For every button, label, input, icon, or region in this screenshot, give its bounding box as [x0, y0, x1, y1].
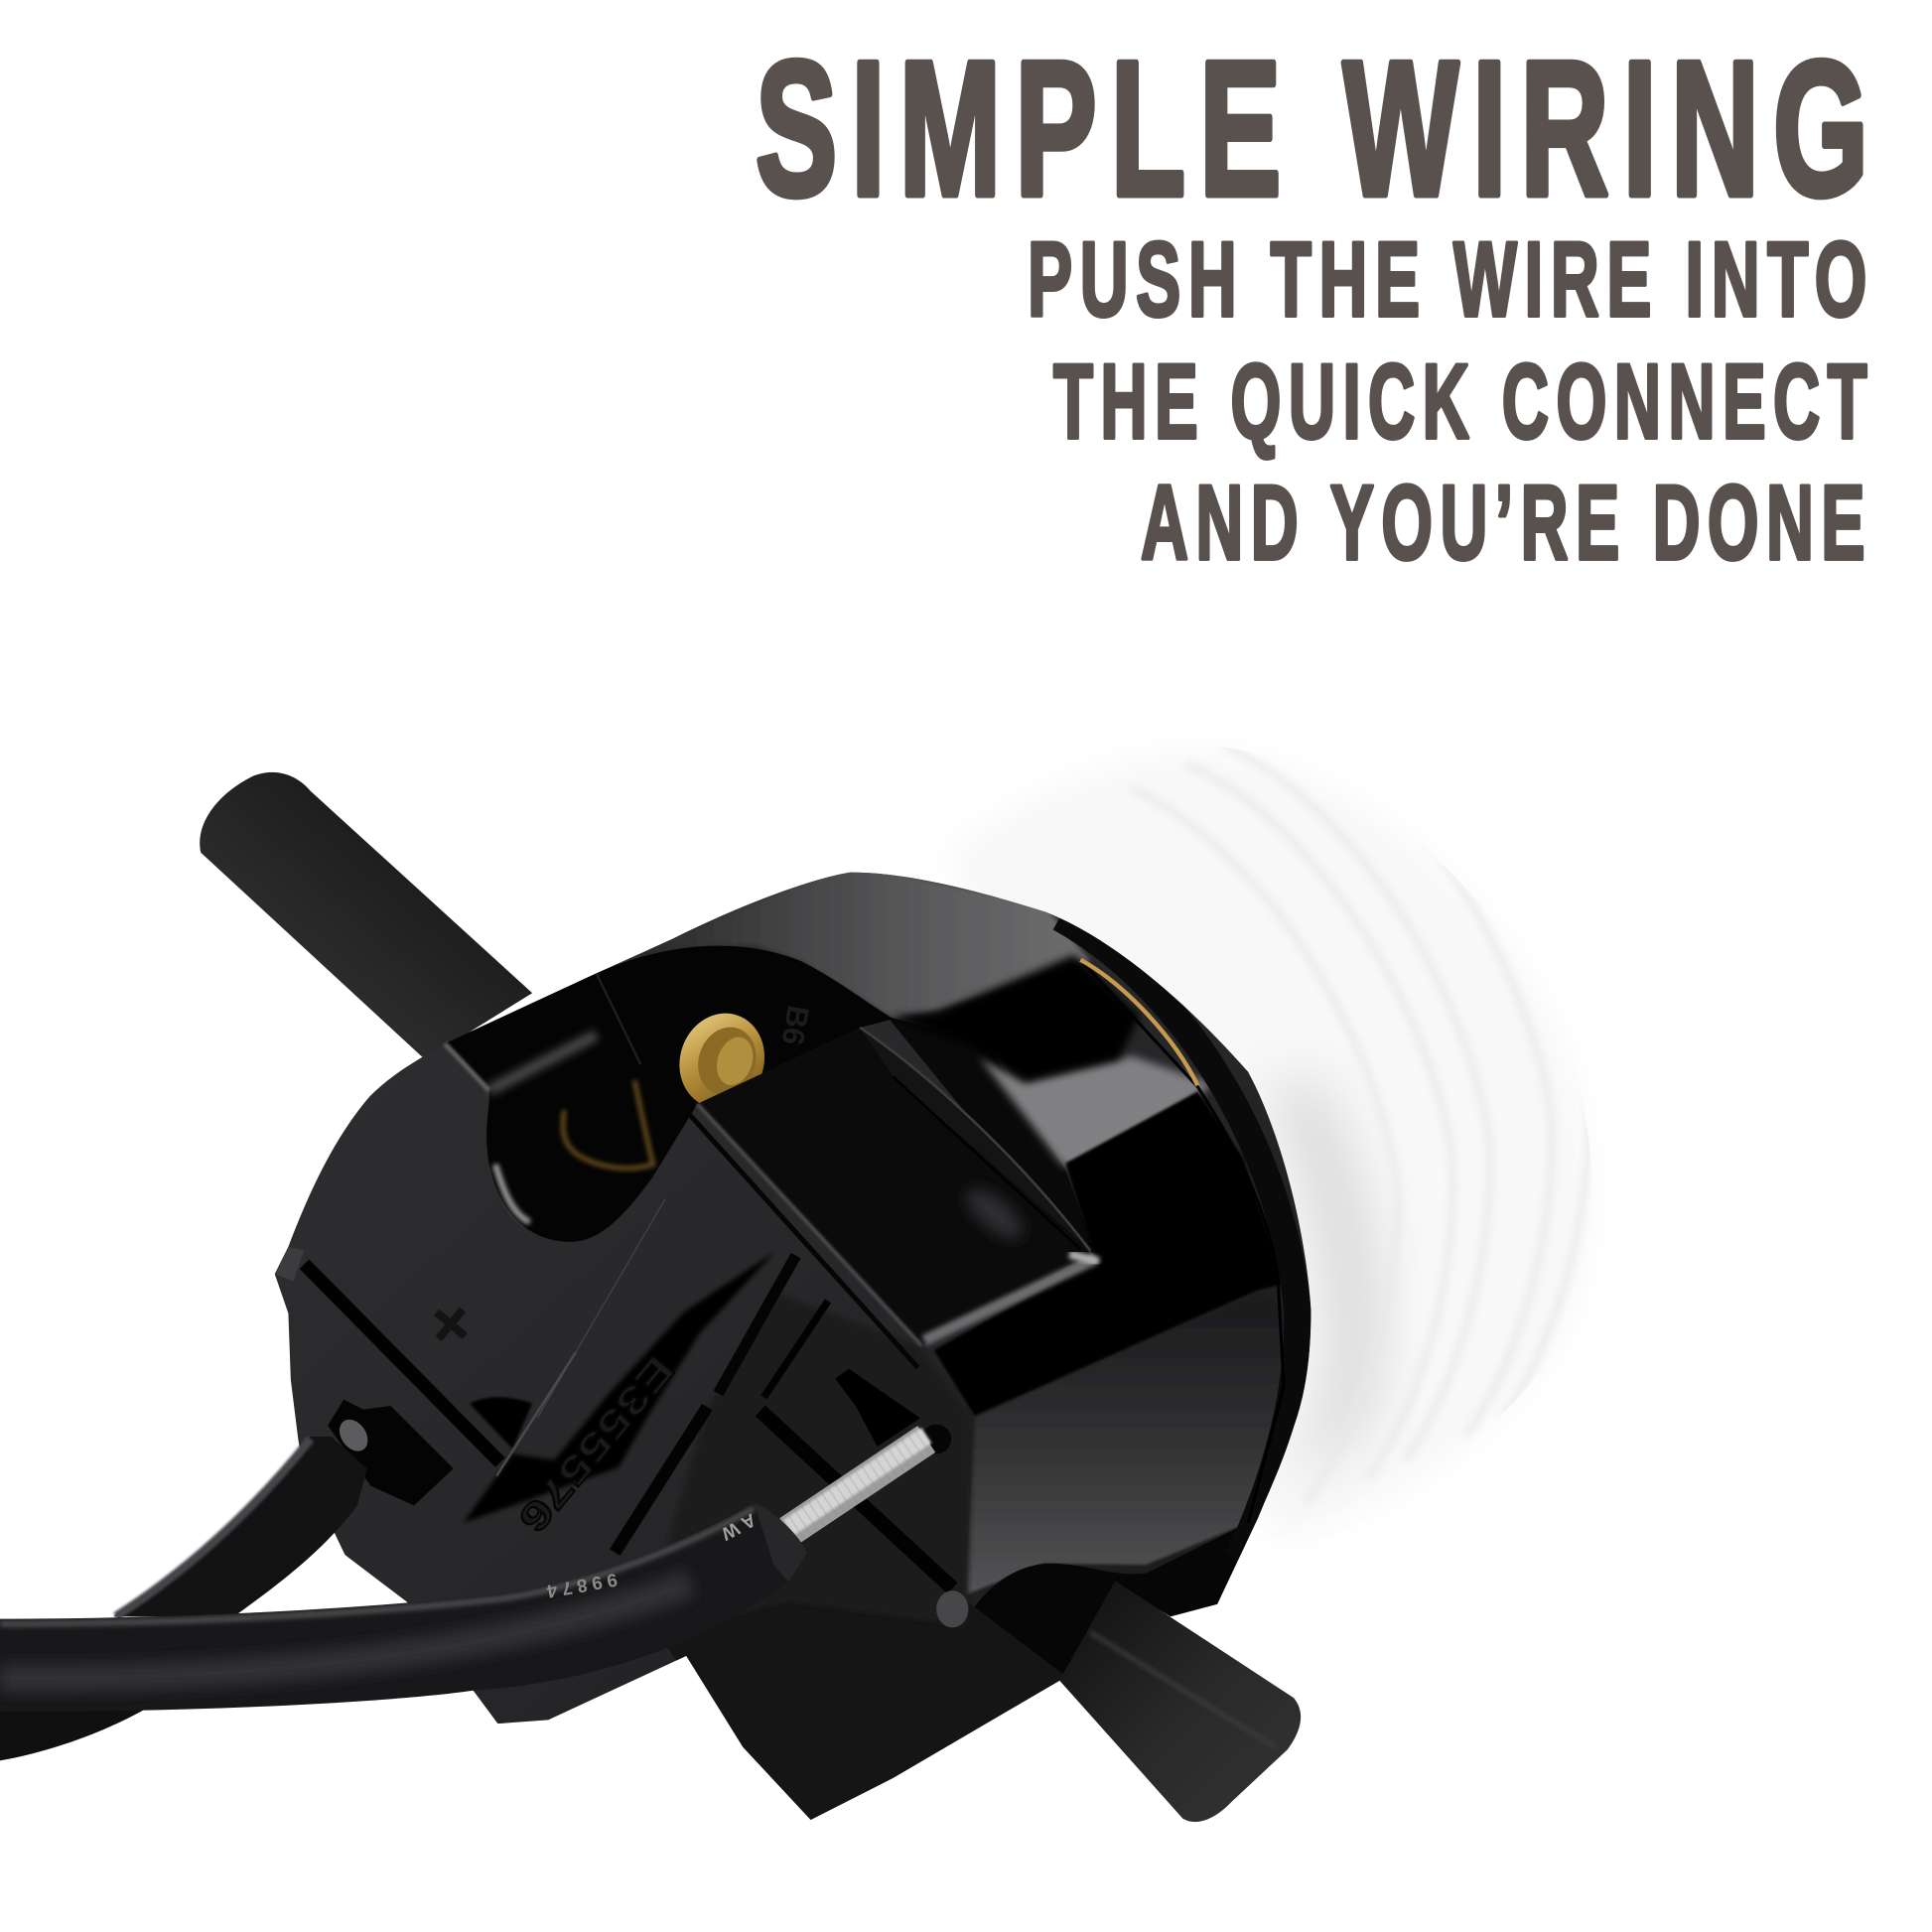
- bare stranded wire: [788, 1436, 926, 1532]
- socket body: [246, 850, 1330, 1836]
- brass eyelet: [667, 1002, 776, 1120]
- ridge lines: [496, 1198, 828, 1553]
- right slot: [760, 1411, 952, 1588]
- dark band along wedge arc: [888, 1017, 1096, 1257]
- gloss smear beside part number: [464, 1252, 775, 1523]
- photo: lamp socket with wires: [0, 702, 1589, 1836]
- top gloss band: [640, 863, 1090, 1019]
- plus mark: +: [408, 1278, 494, 1369]
- wedge block: [690, 1028, 1099, 1368]
- second wire, rear: [0, 1414, 373, 1760]
- bottom lobe: [667, 1602, 1062, 1820]
- left nub: [275, 1247, 305, 1282]
- gray rivet: [936, 1590, 968, 1627]
- front right panel: [667, 1295, 975, 1623]
- black side patch: [934, 1092, 1284, 1416]
- wire print: 99874: [540, 1570, 619, 1603]
- wire entry shadow: [921, 1425, 951, 1453]
- subheading text: [1028, 219, 1874, 582]
- wire hole: [835, 1369, 920, 1447]
- glass bulb base, blurred: [1127, 748, 1591, 1513]
- left wire socket: [328, 1400, 454, 1506]
- front black wire: [0, 1503, 807, 1712]
- collar ring: [1059, 918, 1298, 1559]
- stamped mark in recess: B6: [774, 1003, 816, 1047]
- bottom crescent: [970, 1515, 1263, 1691]
- dark reflection on shoulder: [890, 955, 1140, 1082]
- left slot: [305, 1264, 500, 1462]
- wire print: AW: [713, 1509, 759, 1548]
- lower side sheen: [963, 1293, 1294, 1595]
- lower contact pin: [1059, 1581, 1301, 1822]
- part number: E355576: [510, 1347, 682, 1540]
- brass contact strip: [1080, 960, 1197, 1085]
- black blob by ridge: [470, 1397, 532, 1449]
- wire print: [540, 1509, 759, 1603]
- gray shoulder highlight: [980, 1056, 1213, 1171]
- recess with terminals: [445, 946, 894, 1242]
- upper contact pin: [200, 772, 532, 1059]
